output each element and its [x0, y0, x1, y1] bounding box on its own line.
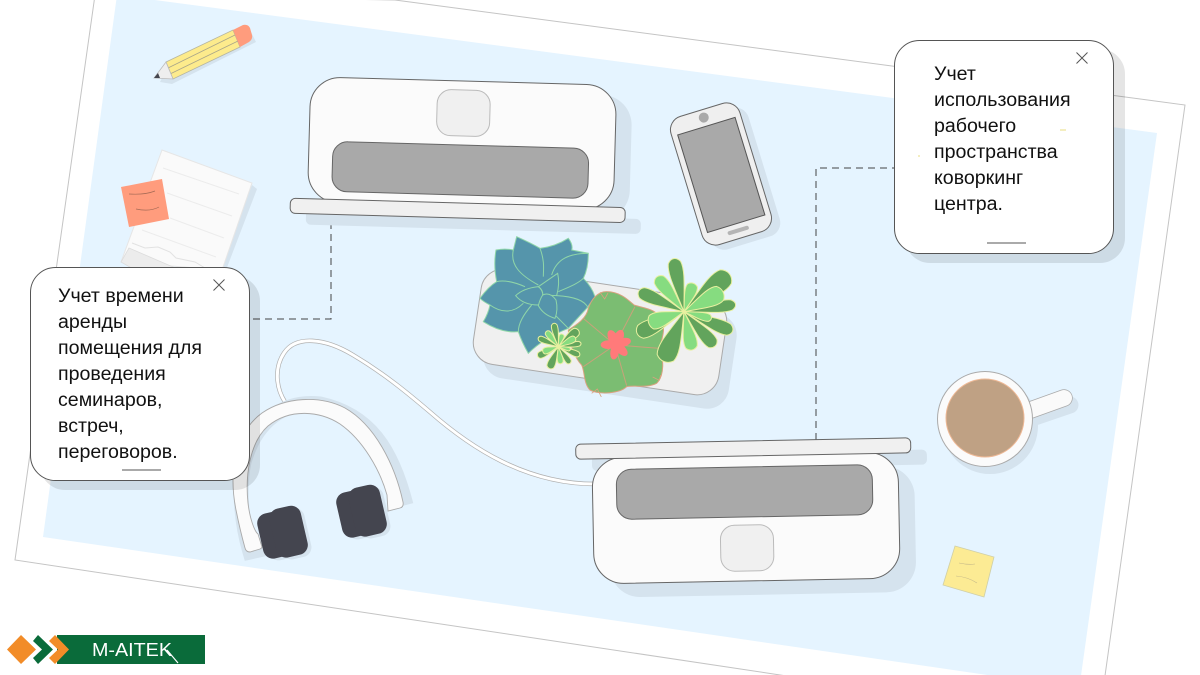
cactus flower	[601, 328, 632, 360]
coffee cup	[938, 372, 1070, 474]
small succulent	[536, 323, 581, 370]
callout: rental time: встреч,	[58, 415, 124, 437]
callout: rental time: Учет времени	[58, 285, 184, 307]
icon: paper notes	[121, 150, 257, 270]
callout: rental time: аренды	[58, 311, 127, 333]
logo	[7, 635, 205, 664]
tray shadow	[480, 280, 740, 412]
callout: rental time	[30, 268, 260, 490]
callout: workspace usage: коворкинг	[934, 167, 1023, 189]
right ear cup	[339, 485, 392, 543]
headphones	[233, 399, 406, 564]
laptop bottom shadow	[592, 450, 930, 598]
plants	[480, 237, 736, 397]
callout: rental time: помещения для	[58, 337, 202, 359]
callout: rental time: переговоров.	[58, 441, 178, 463]
logo: M-AITEK	[92, 640, 172, 660]
callout: workspace usage: рабочего	[934, 115, 1016, 137]
green cactus	[568, 292, 664, 397]
sticky note yellow	[943, 546, 994, 597]
left ear cup	[260, 506, 313, 564]
right succulent	[634, 257, 736, 365]
callout: rental time: проведения	[58, 363, 166, 385]
icon: pencil	[154, 25, 256, 84]
cable	[277, 341, 595, 484]
callout: workspace usage: центра.	[934, 193, 1003, 215]
callout: workspace usage: использования	[934, 89, 1071, 111]
callout: workspace usage: Учет	[934, 63, 976, 85]
callout: rental time: семинаров,	[58, 389, 162, 411]
laptop bottom	[576, 438, 930, 598]
laptop top	[290, 76, 645, 234]
laptop top shadow	[306, 87, 644, 234]
callout: workspace usage: пространства	[934, 141, 1058, 163]
callout: workspace usage	[894, 40, 1125, 263]
phone	[667, 97, 784, 255]
dashed connector lines	[250, 168, 895, 440]
planter tray	[470, 266, 730, 398]
blue succulent	[480, 237, 595, 353]
